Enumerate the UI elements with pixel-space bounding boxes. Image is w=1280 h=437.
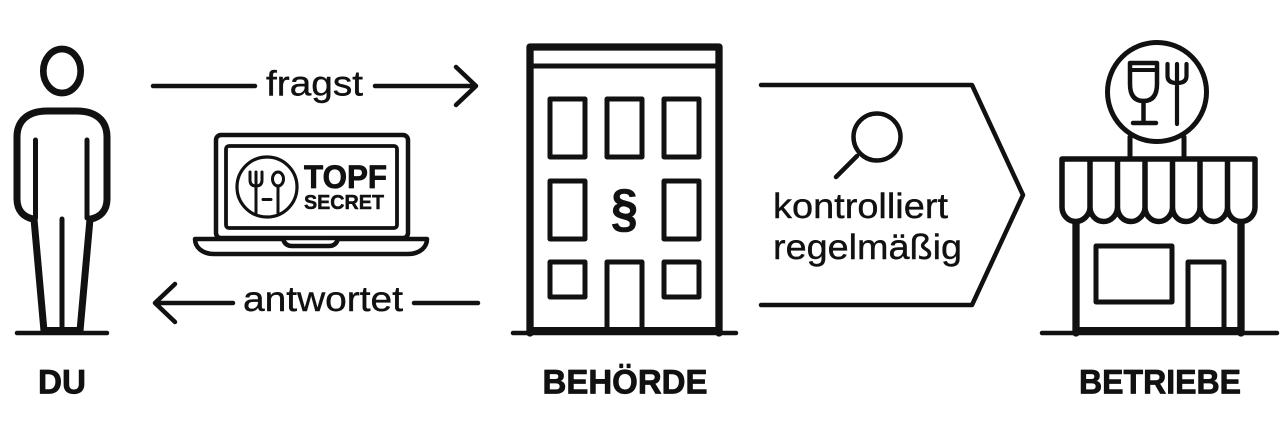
logo text bbox=[304, 159, 387, 214]
restaurant sign bbox=[1108, 42, 1206, 142]
text: kontrolliert regelmäßig: kontrolliert bbox=[773, 187, 948, 226]
paragraph symbol: § bbox=[611, 179, 638, 238]
text: kontrolliert regelmäßig: regelmäßig bbox=[773, 228, 962, 267]
icon: laptop with Topf Secret logo bbox=[195, 135, 427, 254]
icon: authority building bbox=[513, 47, 736, 333]
arrow: fragst bbox=[153, 64, 476, 105]
icon: restaurant bbox=[1042, 42, 1277, 333]
text: kontrolliert regelmäßig bbox=[773, 187, 962, 267]
awning bbox=[1062, 159, 1255, 222]
arrow: antwortet: antwortet bbox=[243, 280, 403, 319]
icon: magnifying glass bbox=[836, 114, 900, 177]
label: BETRIEBE: BETRIEBE bbox=[1079, 364, 1241, 402]
label: BEHÖRDE: BEHÖRDE bbox=[542, 364, 708, 402]
arrow: fragst: fragst bbox=[266, 64, 363, 104]
logo text: TOPF bbox=[304, 159, 387, 195]
arrow: antwortet bbox=[155, 280, 478, 322]
icon: person bbox=[17, 49, 107, 333]
label: DU: DU bbox=[38, 364, 86, 402]
arrow: inspection pentagon bbox=[761, 85, 1023, 305]
logo text: SECRET bbox=[304, 191, 384, 214]
logo circle bbox=[237, 157, 297, 217]
